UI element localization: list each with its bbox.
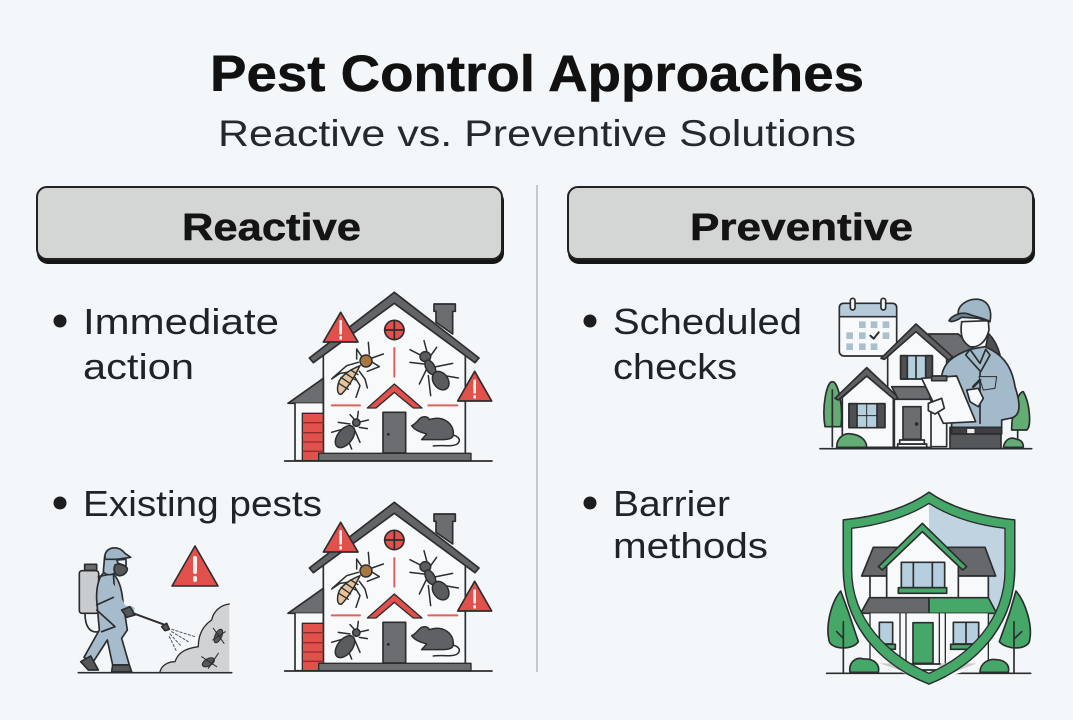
beetle (331, 411, 368, 451)
text block: barrier methods (584, 483, 768, 566)
text block: scheduled checks: Scheduled (613, 301, 802, 342)
shield house (861, 523, 997, 682)
text block: existing pests: Existing pests (83, 483, 322, 524)
termite (332, 552, 383, 607)
text block: immediate action (54, 301, 279, 387)
rat (412, 417, 459, 446)
text block: immediate action: action (83, 346, 194, 387)
icon: infested house 1 (285, 292, 492, 461)
icon: shield house (827, 492, 1031, 684)
subtitle: Reactive vs. Preventive Solutions (218, 113, 856, 154)
text block: barrier methods: Barrier (613, 483, 730, 524)
shield outline front (843, 492, 1015, 684)
warning triangle right (458, 581, 492, 611)
warning triangle right (458, 371, 492, 401)
warning triangle left (323, 312, 358, 342)
termite (332, 342, 383, 397)
icon: scheduled inspection (820, 298, 1032, 449)
rear roof (928, 334, 978, 360)
large house (888, 330, 947, 447)
warning triangle left (323, 522, 358, 552)
panel: reactive header (37, 187, 504, 264)
ant (410, 341, 458, 396)
trees (824, 382, 1030, 447)
bushes (850, 658, 1009, 672)
text block: scheduled checks (584, 301, 802, 387)
calendar (839, 298, 897, 356)
beetle (331, 621, 368, 661)
technician (922, 299, 1019, 449)
panel: preventive header: Preventive (690, 207, 913, 249)
text block: immediate action: Immediate (83, 301, 279, 342)
shield (843, 492, 1015, 684)
text block: barrier methods: methods (613, 525, 768, 566)
panel: preventive header (568, 187, 1035, 264)
trees (828, 591, 1030, 673)
text block: scheduled checks: checks (613, 346, 737, 387)
bushes (837, 434, 1023, 447)
icon: sprayer worker (78, 548, 232, 673)
ant (410, 551, 458, 606)
title: Pest Control Approaches (210, 45, 864, 102)
icon: infested house 2 (285, 502, 492, 671)
panel: reactive header: Reactive (182, 207, 361, 249)
warning triangle (172, 546, 218, 586)
small house (842, 376, 893, 447)
rat (412, 627, 459, 656)
